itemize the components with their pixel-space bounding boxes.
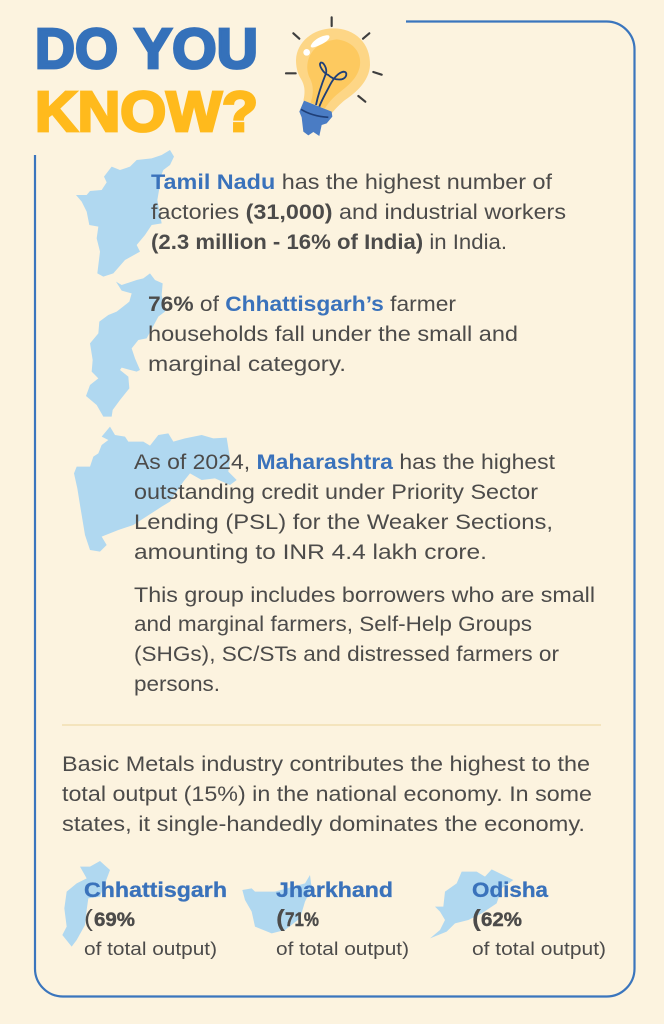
stat: Jharkhand xyxy=(276,879,409,959)
stat: Chhattisgarh: Chhattisgarh xyxy=(84,879,227,902)
stat: Jharkhand: ( xyxy=(276,905,285,931)
map: Odisha small xyxy=(430,869,513,938)
icon: light bulb xyxy=(286,17,382,136)
text: Chhattisgarh fact: marginal category. xyxy=(148,353,346,376)
map: Chhattisgarh xyxy=(86,273,165,417)
text: basic metals: Basic Metals industry contributes the highest to the xyxy=(62,753,590,776)
title xyxy=(35,17,258,144)
text: Maharashtra fact: Lending (PSL) for the Weaker Sections, xyxy=(134,511,553,534)
stat: Jharkhand: 71% xyxy=(285,910,319,931)
stat: Chhattisgarh xyxy=(84,879,227,959)
text: weaker sections definition: and marginal farmers, Self-Help Groups xyxy=(134,613,532,636)
text: weaker sections definition: (SHGs), SC/STs and distressed farmers or xyxy=(134,643,559,666)
map: Chhattisgarh small xyxy=(62,861,110,947)
stat: Chhattisgarh: 69% xyxy=(94,910,135,931)
text: Maharashtra fact: outstanding credit under Priority Sector xyxy=(134,481,538,504)
text: Tamil Nadu fact: factories (31,000) and industrial workers xyxy=(151,201,566,224)
map: Maharashtra xyxy=(74,427,237,552)
text: Maharashtra fact: amounting to INR 4.4 lakh crore. xyxy=(134,541,487,564)
text: basic metals: states, it single-handedly dominates the economy. xyxy=(62,813,585,836)
stat: Chhattisgarh: of total output) xyxy=(84,939,217,959)
text: Tamil Nadu fact: Tamil Nadu has the highest number of xyxy=(151,171,552,194)
stat: Jharkhand: of total output) xyxy=(276,939,409,959)
text: Tamil Nadu fact: (2.3 million - 16% of India) in India. xyxy=(151,231,507,254)
title: YOU xyxy=(134,17,258,81)
stat: Odisha: of total output) xyxy=(472,939,606,959)
title: KNOW? xyxy=(35,80,258,144)
stat: Odisha: 62% xyxy=(481,910,522,931)
text: weaker sections definition: This group includes borrowers who are small xyxy=(134,584,595,607)
stat: Odisha: Odisha xyxy=(472,879,548,902)
stat: Odisha: ( xyxy=(472,905,481,931)
text: Tamil Nadu fact xyxy=(151,171,566,254)
stat: Odisha xyxy=(472,879,606,959)
title: DO xyxy=(35,17,118,81)
text: basic metals xyxy=(62,753,592,836)
text: Maharashtra fact: As of 2024, Maharashtra has the highest xyxy=(134,451,555,474)
text: weaker sections definition: persons. xyxy=(134,673,220,696)
text: basic metals: total output (15%) in the national economy. In some xyxy=(62,783,592,806)
map: Tamil Nadu xyxy=(76,150,174,277)
stat: Jharkhand: Jharkhand xyxy=(276,879,393,902)
text: Chhattisgarh fact: 76% of Chhattisgarh’s farmer xyxy=(148,293,456,316)
text: Chhattisgarh fact: households fall under the small and xyxy=(148,323,518,346)
map: Jharkhand small xyxy=(242,875,312,933)
text: Maharashtra fact xyxy=(134,451,555,564)
text: weaker sections definition xyxy=(134,584,595,696)
text: Chhattisgarh fact xyxy=(148,293,518,376)
stat: Chhattisgarh: ( xyxy=(84,905,93,931)
